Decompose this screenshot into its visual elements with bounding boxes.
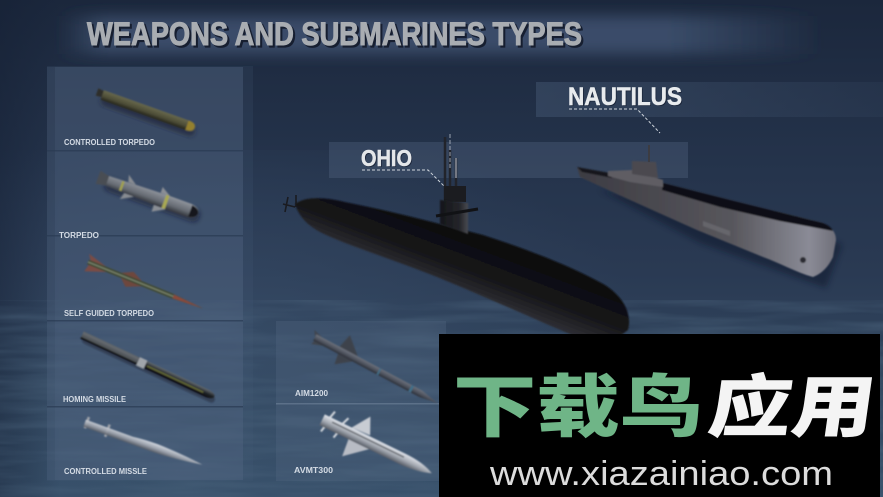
weapon: AIM1200 [304, 319, 446, 416]
submarine: Ohio [283, 134, 629, 336]
label band: Ohio [329, 142, 688, 178]
weapon: controlled torpedo [93, 88, 198, 138]
label: Nautilus [568, 83, 683, 133]
label band: Nautilus [536, 82, 883, 117]
weapon: controlled missile [83, 416, 205, 471]
weapon: torpedo [93, 165, 205, 228]
label: torpedo: TORPEDO [59, 231, 99, 240]
label: self guided torpedo: SELF GUIDED TORPEDO [64, 309, 154, 318]
label: Nautilus: NAUTILUS [568, 83, 682, 111]
watermark box [439, 334, 883, 497]
weapon: homing missile [79, 331, 218, 404]
label: controlled torpedo: CONTROLLED TORPEDO [64, 138, 155, 147]
label: Ohio: OHIO [361, 145, 412, 171]
panel: air missiles [276, 319, 446, 495]
label: controlled missile: CONTROLLED MISSLE [64, 467, 148, 476]
watermark: white logo text: 应用 [703, 352, 883, 451]
label: Ohio [361, 145, 445, 187]
watermark: url: www.xiazainiao.com [489, 455, 833, 493]
weapon: self guided torpedo [82, 254, 206, 318]
title: WEAPONS AND SUBMARINES TYPES [89, 18, 584, 54]
submarine: Nautilus [577, 145, 842, 288]
title band [60, 16, 820, 54]
weapon: AVMT300 [312, 398, 442, 495]
title: WEAPONS AND SUBMARINES TYPES [87, 16, 582, 52]
panel: weapons list [47, 66, 253, 481]
label: Ohio: OHIO [362, 146, 413, 172]
label: Nautilus: NAUTILUS [569, 84, 683, 112]
label: homing missile: HOMING MISSILE [63, 395, 127, 404]
watermark: green logo text: 下载鸟 [453, 352, 703, 451]
label: AVMT300: AVMT300 [294, 465, 333, 475]
label: AIM1200: AIM1200 [295, 388, 328, 398]
